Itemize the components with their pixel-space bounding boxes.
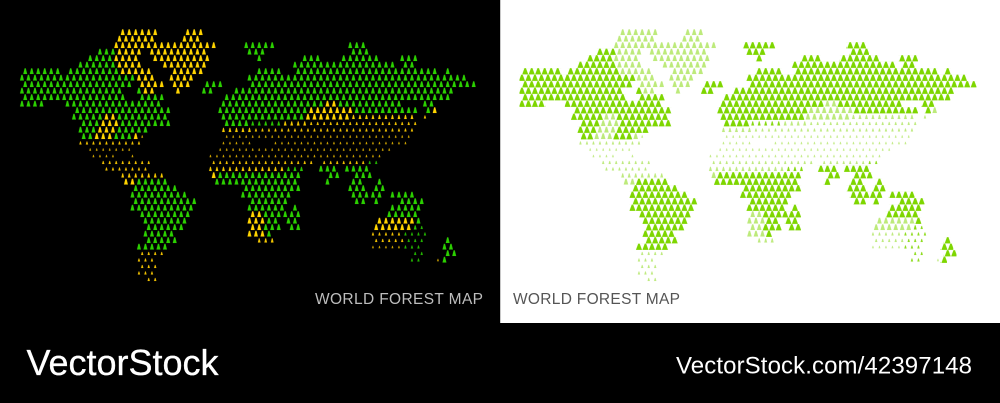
- medium green trees: [250, 123, 418, 227]
- medium yellow trees: [120, 117, 414, 240]
- title: dark panel: WORLD FOREST MAP: [315, 291, 483, 308]
- dense green trees: [520, 45, 976, 260]
- tiny yellow trees: [87, 136, 440, 260]
- footer brand: VectorStock: [26, 342, 220, 383]
- footer image id: VectorStock.com/42397148: [676, 352, 972, 380]
- title: white panel: WORLD FOREST MAP: [513, 291, 680, 308]
- panel: white map background: [500, 0, 1000, 323]
- dense green trees: [20, 45, 476, 260]
- pale green small trees: [578, 117, 928, 279]
- pale green large trees: [594, 32, 938, 234]
- large yellow trees: [94, 32, 438, 234]
- pale green tiny trees: [587, 136, 940, 260]
- map: light world forest map: [520, 32, 976, 279]
- small yellow trees: [78, 117, 428, 279]
- medium green trees: [750, 123, 918, 227]
- small green trees: [366, 162, 428, 260]
- small green trees: [866, 162, 928, 260]
- map: dark world forest map: [20, 32, 476, 279]
- panel edge: [500, 0, 501, 323]
- pale green medium trees: [620, 117, 914, 240]
